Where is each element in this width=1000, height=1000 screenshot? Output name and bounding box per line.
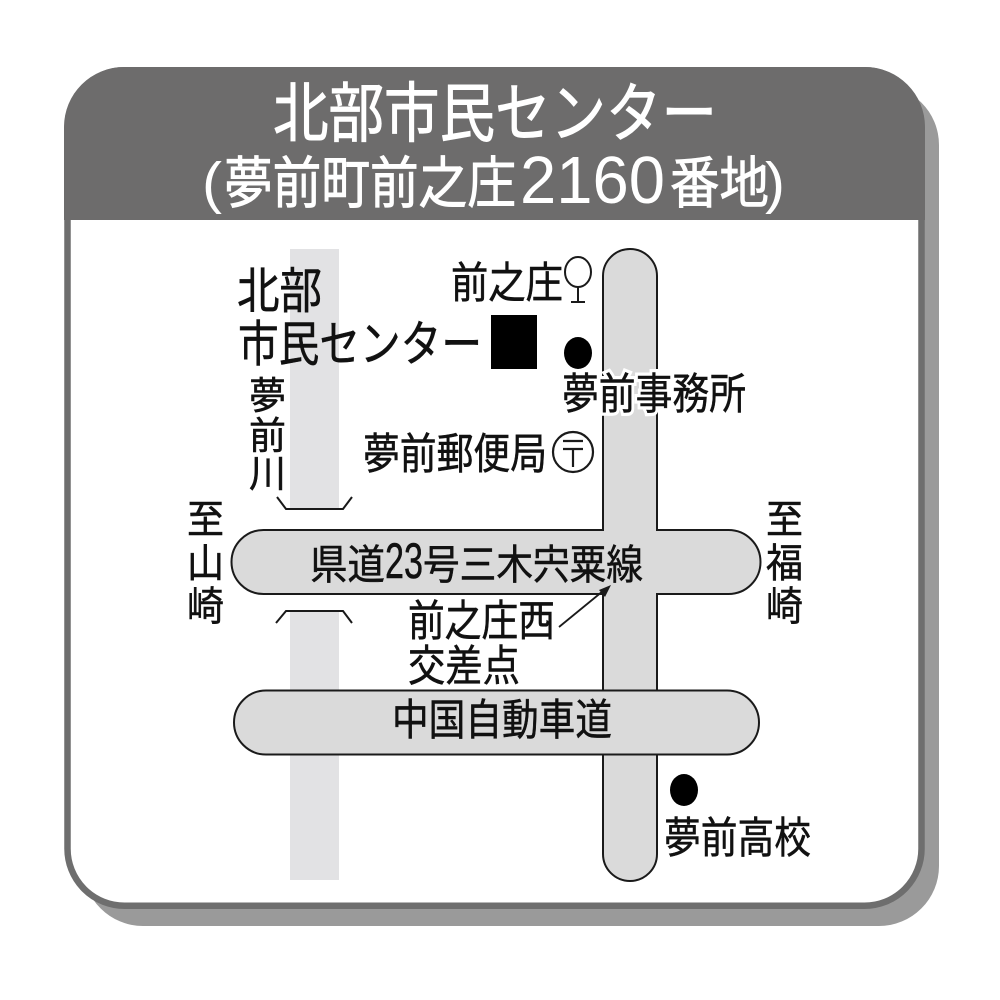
label: to Fukusaki: 至 <box>766 498 803 542</box>
label: office: 夢前事務所 <box>562 371 746 419</box>
facility name: 北部 <box>237 265 322 319</box>
expressway <box>234 690 759 754</box>
label: river: 川 <box>249 454 286 496</box>
label: prefectural road <box>310 533 643 589</box>
callout arrow <box>559 585 611 627</box>
label: prefectural road: 23 <box>385 533 423 589</box>
label: to Fukusaki: 福 <box>766 542 803 586</box>
label: to Fukusaki <box>766 498 803 629</box>
label: to Yamasaki: 崎 <box>187 585 224 629</box>
label: river: 前 <box>249 416 286 458</box>
title: 夢前町前之庄 <box>224 152 516 215</box>
label: river <box>249 376 286 496</box>
icon: school dot <box>670 774 698 806</box>
label: prefectural road: 県道 <box>310 542 385 588</box>
title: ( <box>202 151 222 215</box>
label: to Yamasaki: 至 <box>187 498 224 542</box>
label: intersection <box>408 598 555 691</box>
facility marker <box>491 315 537 369</box>
card panel <box>64 67 925 906</box>
vertical road <box>603 249 657 881</box>
label: river: 夢 <box>249 376 286 418</box>
title: 2160 <box>520 143 665 218</box>
icon: traffic signal symbol <box>565 257 591 302</box>
title: 番地 <box>670 152 769 215</box>
facility name: 市民センター <box>238 318 482 372</box>
label: post office: 夢前郵便局 <box>363 431 547 479</box>
label: office: 夢前事務所 <box>562 371 746 419</box>
label: school: 夢前高校 <box>664 815 811 863</box>
label: intersection: 交差点 <box>408 643 520 691</box>
label: expressway: 中国自動車道 <box>392 697 612 745</box>
river <box>290 249 339 880</box>
label: to Yamasaki <box>187 498 224 629</box>
label: to Yamasaki: 山 <box>187 542 224 586</box>
facility name <box>237 265 482 372</box>
label: prefectural road: 号三木宍粟線 <box>423 542 643 588</box>
title: ) <box>765 151 785 215</box>
label: Maenosho: 前之庄 <box>451 260 563 308</box>
bridge marks <box>276 497 352 623</box>
card shadow <box>83 85 939 926</box>
label: intersection: 前之庄西 <box>408 598 555 646</box>
label: to Fukusaki: 崎 <box>766 585 803 629</box>
icon: office dot <box>564 337 592 369</box>
icon: post office <box>553 432 593 472</box>
prefectural road <box>232 528 760 596</box>
header band <box>64 67 925 220</box>
title: 北部市民センター <box>273 77 717 150</box>
title <box>202 77 785 218</box>
